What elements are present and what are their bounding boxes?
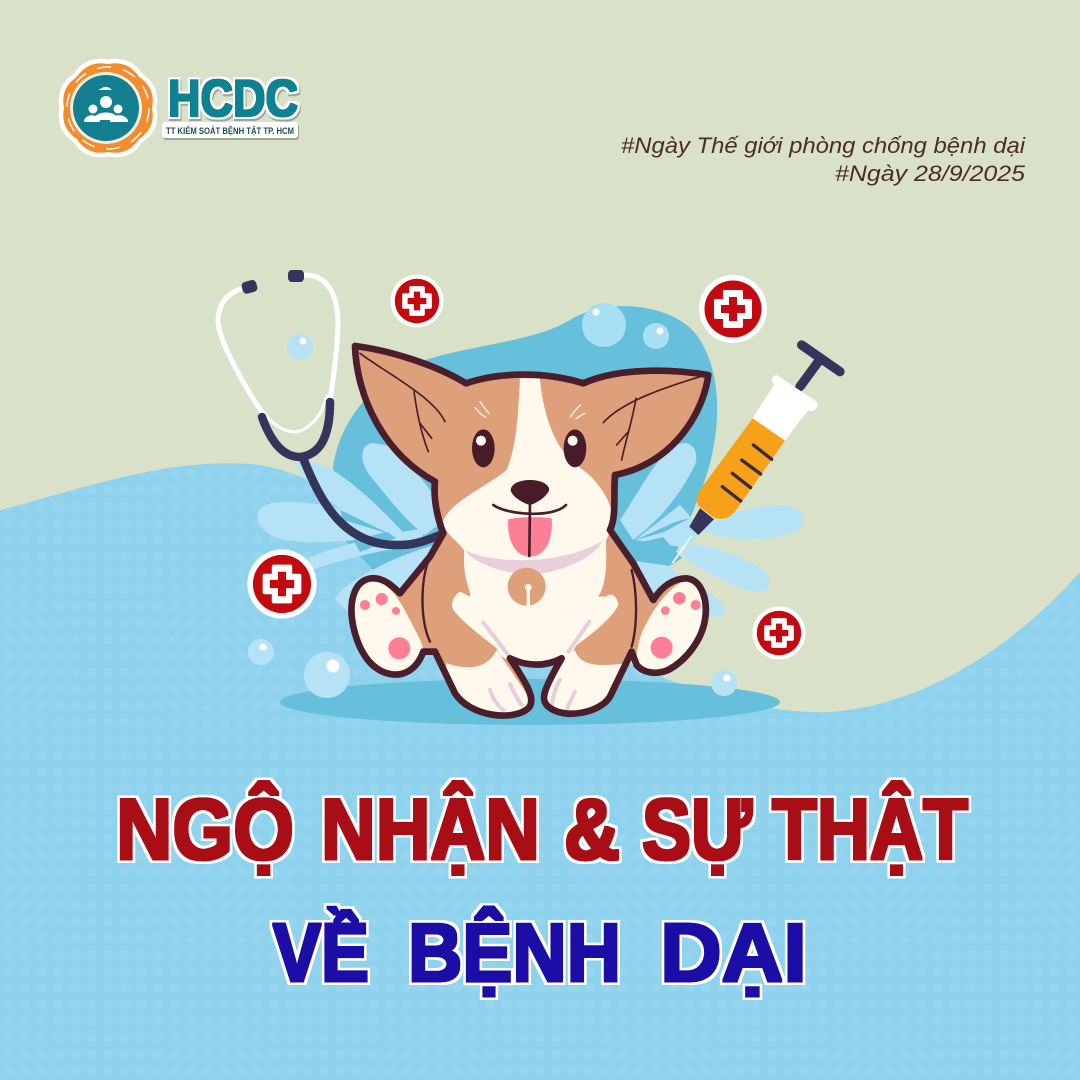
dog outline: [352, 346, 708, 716]
floor shadow: [280, 679, 780, 725]
eyes: [472, 429, 586, 467]
logo wordmark: HCDC: [168, 70, 298, 128]
hashtag text: #Ngày 28/9/2025: [835, 161, 1026, 186]
leg markings: [483, 622, 589, 710]
dog silhouette fill: [352, 346, 708, 716]
medical badge 3: [247, 549, 317, 619]
medical badge 1: [390, 274, 444, 328]
hashtag text: #Ngày Thế giới phòng chống bệnh dại: [621, 133, 1026, 158]
title line 2: [273, 906, 807, 999]
logo people: [84, 87, 128, 122]
collar: [465, 542, 602, 575]
title line 2: BỆNH: [408, 906, 621, 999]
title line 1: [116, 782, 968, 878]
water splash petals: [258, 443, 804, 622]
logo emblem: [63, 63, 153, 153]
blue blob behind dog: [333, 306, 717, 620]
brow marks: [475, 402, 585, 419]
bubbles: [248, 303, 737, 698]
paw pads: [360, 592, 701, 659]
icon: stethoscope: [218, 270, 440, 545]
logo tagline: TT KIỂM SOÁT BỆNH TẬT TP. HCM: [166, 125, 294, 137]
dog cream markings: [347, 378, 707, 730]
title line 2: DẠI: [660, 906, 807, 999]
splash facets: [340, 510, 690, 565]
mouth: [493, 503, 566, 556]
medical badge 2: [699, 275, 767, 343]
icon: syringe: [672, 345, 840, 563]
title line 1: NGỘ: [116, 782, 294, 878]
title line 2: VỀ: [273, 906, 369, 999]
title line 1: NHẬN: [321, 782, 540, 878]
bell: [508, 568, 546, 607]
background: blue wave: [0, 463, 1080, 1080]
logo tagline: [162, 122, 299, 140]
tongue: [508, 517, 552, 557]
logo: HCDC: [63, 63, 299, 153]
icon: dog: [347, 346, 708, 730]
title line 1: &: [564, 782, 620, 878]
title line 1: THẬT: [772, 782, 968, 878]
hashtag text: [621, 133, 1026, 186]
nose: [511, 480, 549, 505]
title line 1: SỰ: [642, 782, 753, 878]
medical badge 4: [752, 606, 806, 660]
ear and leg lines: [360, 353, 700, 460]
